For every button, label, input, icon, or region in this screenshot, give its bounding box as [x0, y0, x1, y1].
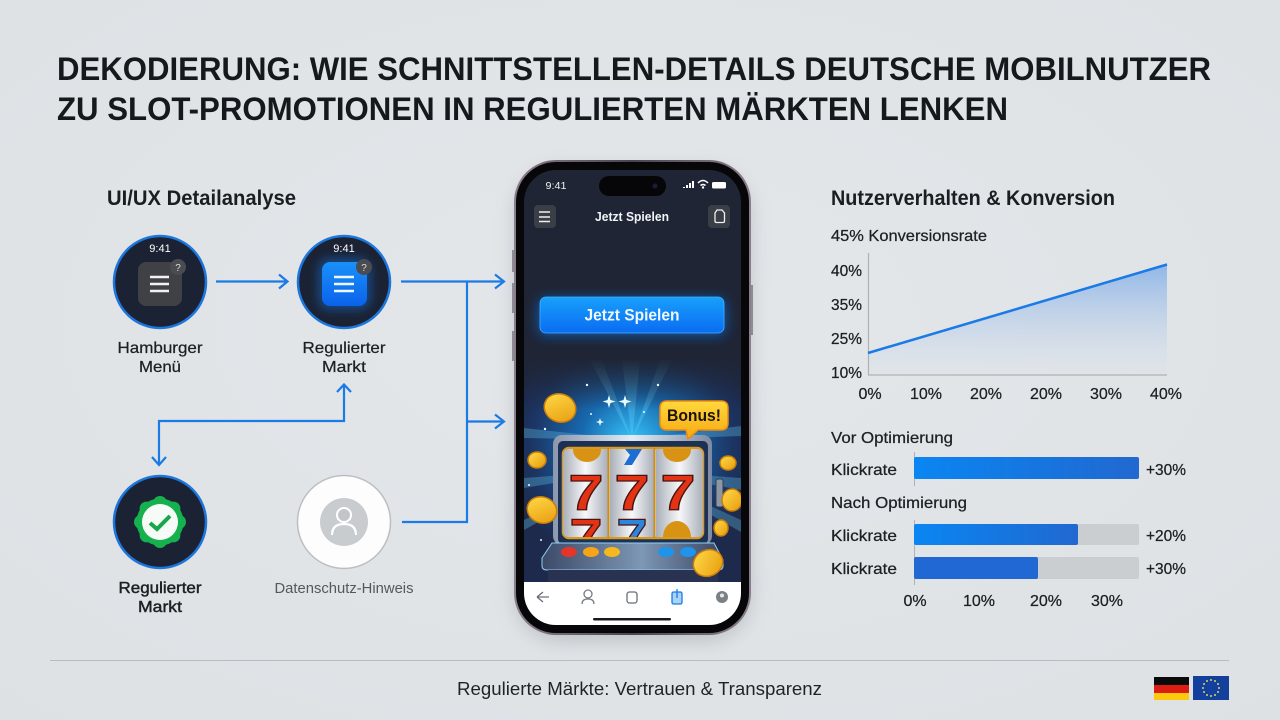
slot artwork — [523, 358, 742, 583]
app header: Jetzt Spielen — [595, 209, 669, 224]
panel: user behaviour and conversion — [831, 187, 1186, 610]
bar chart: click rate before and after — [831, 430, 1186, 610]
icon: green verified badge circle — [114, 476, 206, 568]
area chart: conversion rate — [831, 228, 1182, 403]
label: Hamburger Menü: Hamburger — [118, 340, 203, 357]
call to action button — [538, 297, 726, 336]
label: Regulierter Markt (top): Markt — [322, 359, 367, 376]
reels: sevens: 7 — [660, 465, 696, 521]
flag: EU — [1193, 676, 1229, 700]
area chart: conversion rate: 10% — [910, 386, 942, 403]
area chart: conversion rate: 0% — [858, 386, 882, 403]
area chart: conversion rate: 45% Konversionsrate — [831, 228, 987, 245]
bar chart: click rate before and after: Vor Optimierung — [831, 430, 953, 447]
panel: UI/UX analysis — [107, 187, 504, 616]
call to action button: Jetzt Spielen — [584, 306, 680, 324]
status bar — [546, 176, 726, 196]
area chart: conversion rate: 25% — [831, 331, 862, 348]
bar chart: click rate before and after: Klickrate — [831, 561, 897, 578]
bar chart: click rate before and after: 0% — [903, 593, 927, 610]
bar chart: click rate before and after: Klickrate — [831, 528, 897, 545]
label: Regulierter Markt (bottom): Regulierter — [118, 580, 202, 597]
bar chart: click rate before and after: 30% — [1091, 593, 1123, 610]
label: Regulierter Markt (top): Regulierter — [302, 340, 386, 357]
label: Regulierter Markt (top) — [302, 340, 386, 376]
footer text: Regulierte Märkte: Vertrauen & Transparenz — [457, 679, 822, 699]
area chart: conversion rate: 20% — [970, 386, 1002, 403]
phone mockup — [513, 160, 752, 640]
bar chart: click rate before and after: 20% — [1030, 593, 1062, 610]
area chart: conversion rate: 40% — [831, 263, 862, 280]
heading: Nutzerverhalten & Konversion: Nutzerverhalten & Konversion — [831, 187, 1115, 210]
icon: hamburger menu circle: ? — [175, 263, 181, 274]
reels: sevens: 7 — [614, 465, 650, 521]
phone screen — [523, 170, 742, 626]
reels: sevens: 7 — [616, 509, 648, 565]
bonus speech bubble — [660, 401, 728, 439]
bar chart: click rate before and after: +30% — [1146, 462, 1186, 479]
reels: sevens — [570, 474, 694, 537]
area chart: conversion rate: 35% — [831, 297, 862, 314]
label: Regulierter Markt (bottom) — [118, 580, 202, 616]
bar chart: click rate before and after: +30% — [1146, 561, 1186, 578]
app header — [534, 205, 730, 228]
icon: hamburger menu circle — [114, 236, 206, 328]
flag: Germany — [1154, 677, 1189, 700]
area chart: conversion rate: 40% — [1150, 386, 1182, 403]
arrow: regulated market connector — [152, 384, 351, 465]
bonus speech bubble: Bonus! — [667, 406, 721, 425]
coins — [523, 389, 742, 581]
bar chart: click rate before and after: Nach Optimierung — [831, 495, 967, 512]
reels: sevens: 7 — [570, 509, 602, 565]
icon: highlighted menu circle: 9:41 — [333, 243, 355, 255]
area chart: conversion rate: 20% — [1030, 386, 1062, 403]
arrow: hamburger to regulated — [216, 274, 288, 288]
title: ZU SLOT-PROMOTIONEN IN REGULIERTEN MÄRKTEN LENKEN — [57, 91, 1008, 127]
status bar: 9:41 — [546, 180, 567, 192]
icon: hamburger menu circle: 9:41 — [149, 243, 171, 255]
reels: sevens: 7 — [568, 465, 604, 521]
title: DEKODIERUNG: WIE SCHNITTSTELLEN-DETAILS DEUTSCHE MOBILNUTZER — [57, 51, 1211, 87]
slot machine — [542, 435, 723, 583]
heading: UI/UX Detailanalyse: UI/UX Detailanalyse — [107, 187, 296, 210]
icon: privacy user circle — [298, 476, 390, 568]
bottom tab bar — [524, 582, 741, 626]
icon: highlighted menu circle: ? — [361, 263, 367, 274]
icon: highlighted menu circle — [298, 236, 390, 328]
arrow: connector to phone — [401, 274, 504, 522]
bar chart: click rate before and after: +20% — [1146, 528, 1186, 545]
area chart: conversion rate: 10% — [831, 365, 862, 382]
title — [57, 51, 1211, 127]
label: Regulierter Markt (bottom): Markt — [138, 599, 183, 616]
area chart: conversion rate: 30% — [1090, 386, 1122, 403]
label: Hamburger Menü — [118, 340, 203, 376]
label: Hamburger Menü: Menü — [139, 359, 181, 376]
label: Datenschutz-Hinweis: Datenschutz-Hinweis — [274, 581, 414, 597]
bar chart: click rate before and after: 10% — [963, 593, 995, 610]
bar chart: click rate before and after: Klickrate — [831, 462, 897, 479]
